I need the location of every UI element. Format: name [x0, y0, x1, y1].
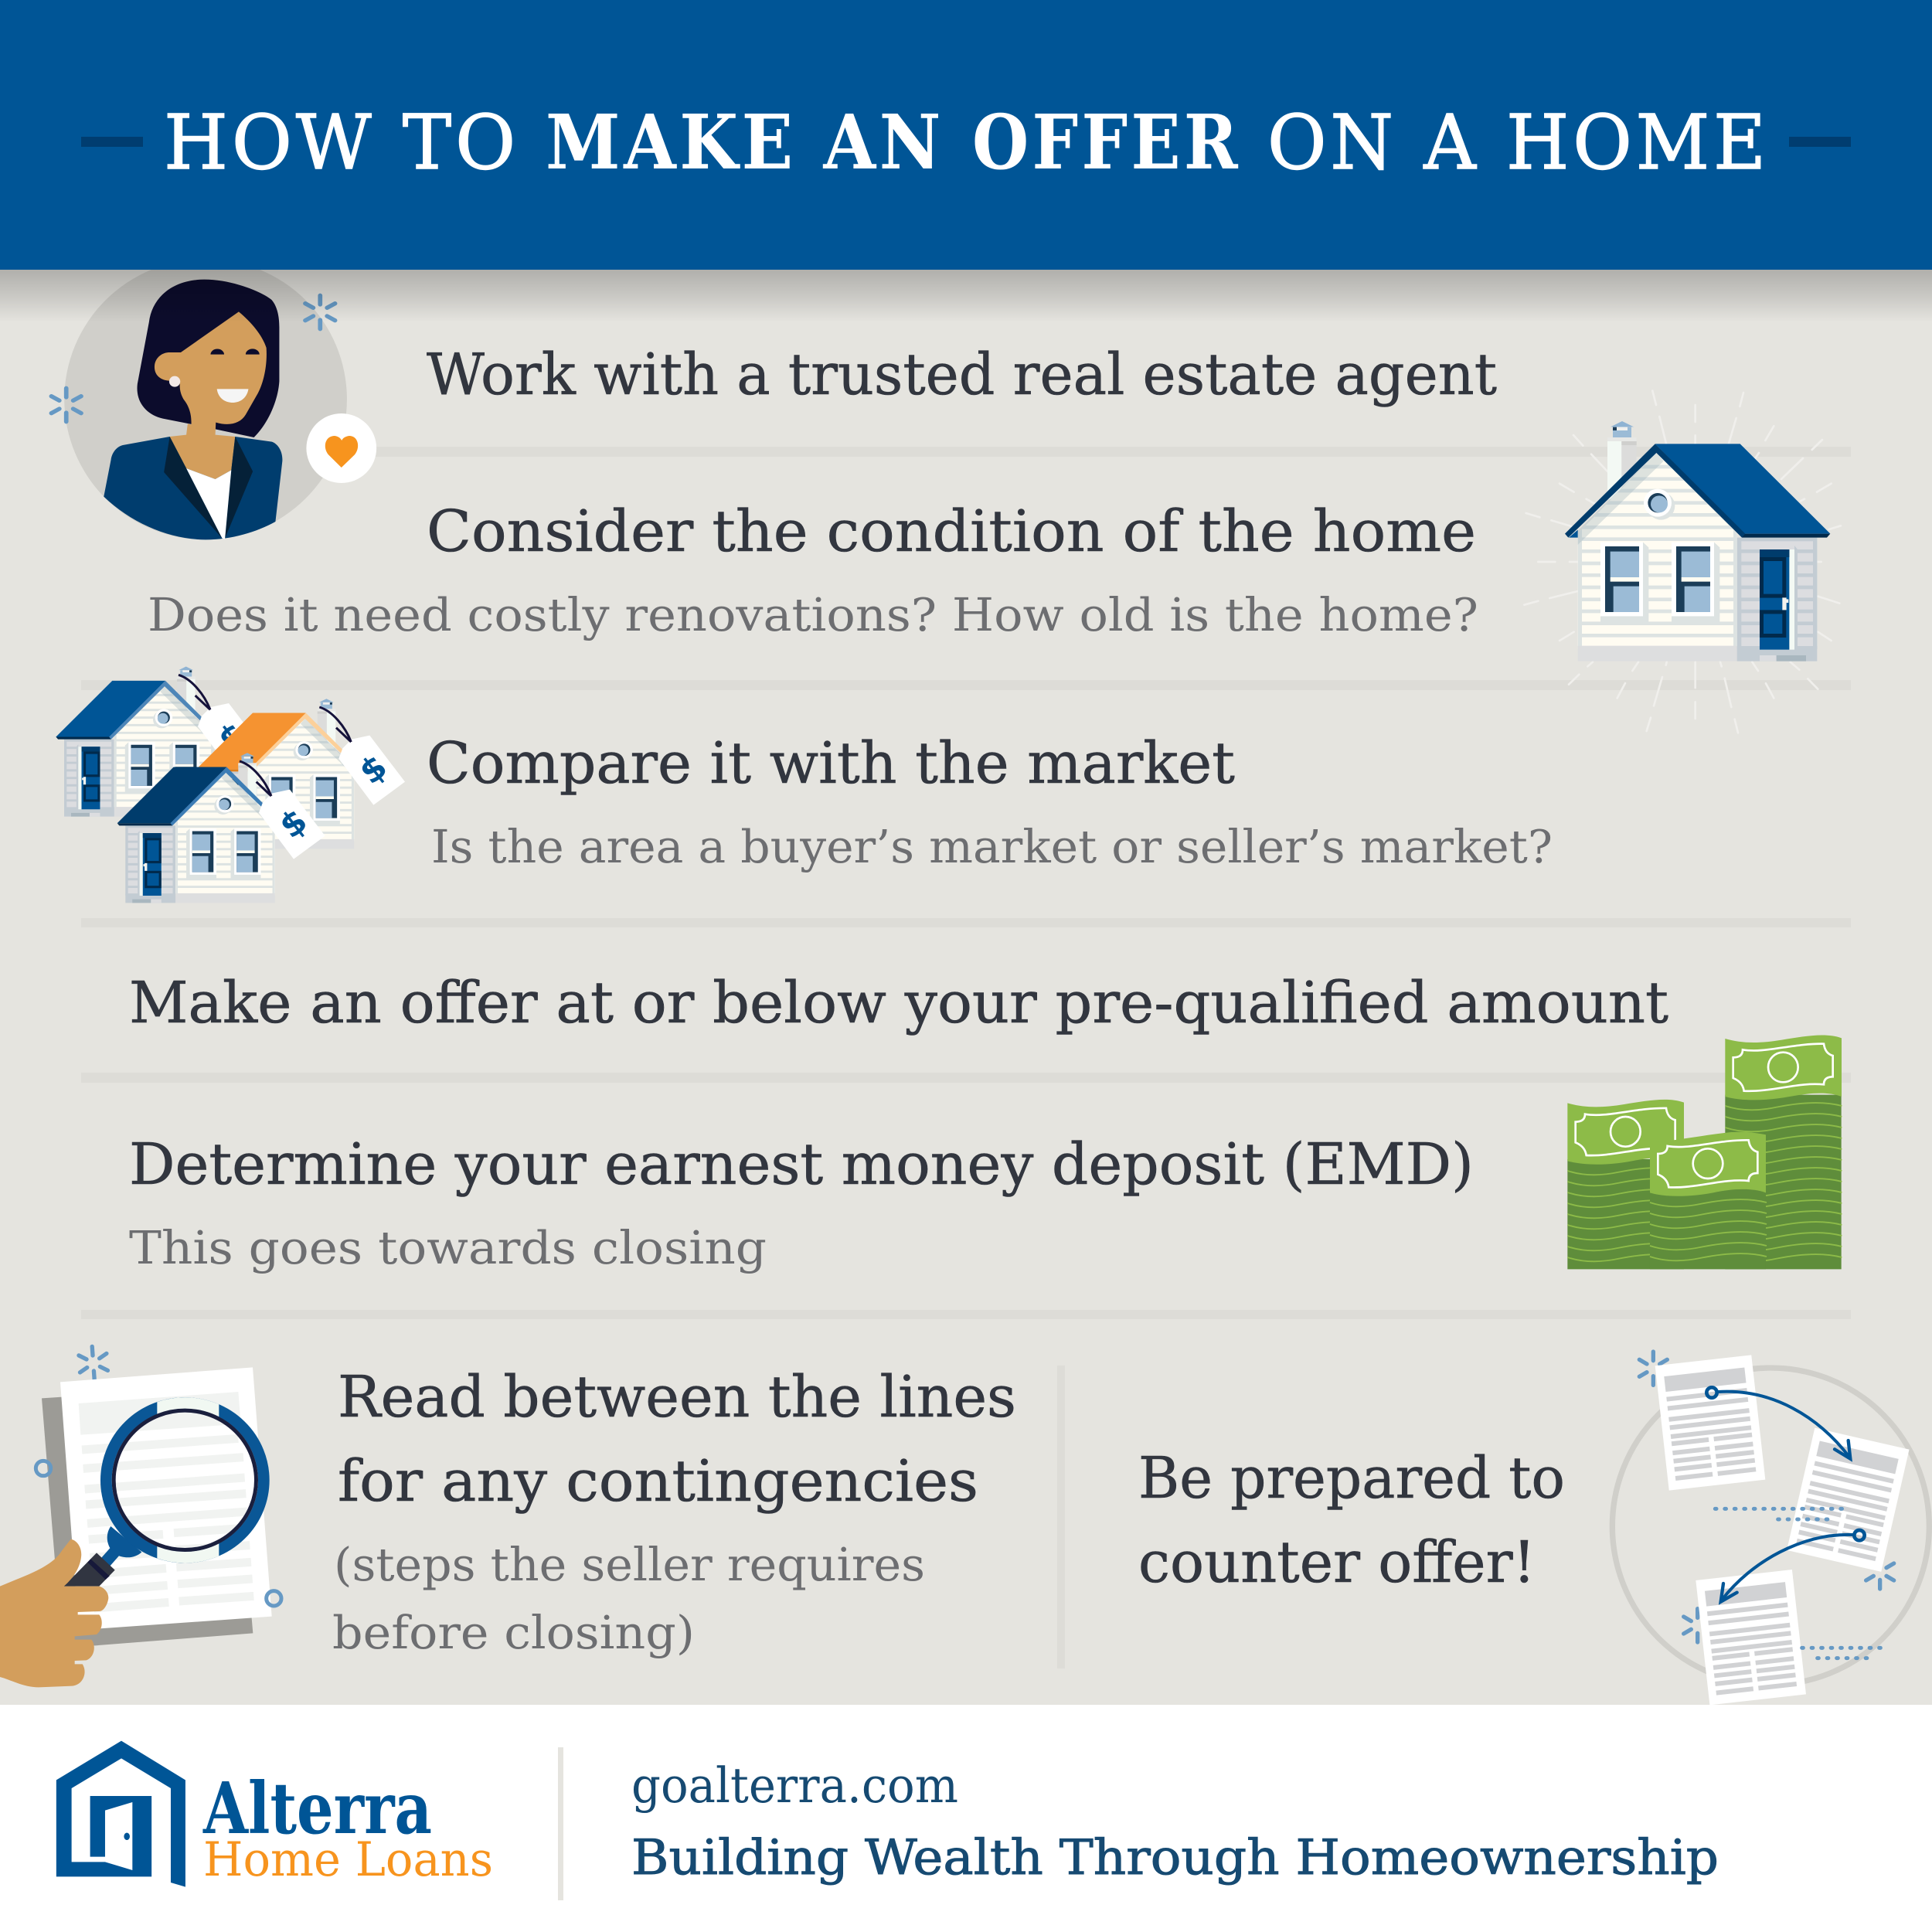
- agent hair: [137, 280, 279, 437]
- title: [81, 98, 1851, 186]
- price tag: $: [352, 747, 395, 792]
- price tag: [319, 707, 405, 805]
- agent lapels: [164, 437, 253, 539]
- header band: [0, 0, 1932, 270]
- logo wordmark: Alterra: [202, 1767, 432, 1850]
- counter offer line 2: counter offer!: [1138, 1529, 1536, 1596]
- heart badge: [306, 413, 376, 483]
- website: goalterra.com: [631, 1757, 958, 1814]
- agent earring: [169, 376, 180, 387]
- price tag: $: [273, 801, 315, 846]
- house: [1565, 421, 1830, 662]
- header shadow: [0, 270, 1932, 322]
- subtext: market: Is the area a buyer’s market or seller’s market?: [431, 820, 1553, 873]
- title: MAKE AN: [546, 98, 944, 186]
- logo: [56, 1741, 493, 1887]
- price tag: $: [212, 716, 253, 760]
- sparkle: [1866, 1556, 1894, 1589]
- agent eyes: [210, 349, 260, 355]
- arrow: second document to third: [1721, 1530, 1865, 1602]
- step: compare with market: [427, 730, 1553, 873]
- agent smile: [217, 389, 248, 403]
- sparkle: [1684, 1609, 1712, 1642]
- document: [1787, 1428, 1909, 1572]
- step: earnest money deposit: [129, 1131, 1474, 1274]
- hand: [0, 1539, 108, 1687]
- subtext line 2: before closing): [332, 1606, 695, 1659]
- document back sheet: [42, 1386, 253, 1646]
- step: read between the lines: Read between the lines: [338, 1364, 1016, 1430]
- logo tagline: Home Loans: [203, 1832, 493, 1887]
- section dividers: [81, 447, 1851, 1668]
- title: ON A HOME: [1267, 99, 1770, 186]
- illustration: magnifier over document: [0, 1345, 281, 1687]
- illustration: documents exchanged in circle: [1612, 1352, 1929, 1705]
- sparkle: [1639, 1352, 1667, 1385]
- step: work with agent: Work with a trusted real estate agent: [427, 342, 1497, 408]
- illustration: three houses with price tags: [56, 667, 405, 903]
- magnifier handle: [64, 1526, 141, 1587]
- title: OFFER: [972, 98, 1241, 186]
- step: consider condition: Consider the condition of the home: [427, 498, 1476, 565]
- step: counter offer: [1138, 1445, 1565, 1596]
- slogan: Building Wealth Through Homeownership: [631, 1829, 1719, 1886]
- step: read between the lines: [332, 1364, 1016, 1659]
- step: consider condition: [148, 498, 1478, 641]
- document: [60, 1367, 272, 1630]
- document: [1655, 1355, 1765, 1491]
- title: HOW TO: [164, 99, 519, 186]
- decorative rings: [36, 1461, 281, 1606]
- heading line 2: for any contingencies: [338, 1448, 978, 1515]
- sparkle: [305, 295, 335, 329]
- step: earnest money deposit: Determine your earnest money deposit (EMD): [129, 1131, 1474, 1198]
- illustration: stacks of money: [1567, 1036, 1842, 1269]
- step: counter offer: Be prepared to: [1138, 1445, 1565, 1512]
- footer divider: [558, 1747, 563, 1900]
- sparkle: [51, 388, 81, 422]
- magnifier lens: [106, 1403, 264, 1557]
- step: make an offer: Make an offer at or below your pre-qualified amount: [129, 970, 1668, 1036]
- subtext: condition: Does it need costly renovations? How old is the home?: [148, 588, 1478, 641]
- subtext line 1: (steps the seller requires: [334, 1538, 925, 1591]
- subtext: closing: This goes towards closing: [129, 1221, 767, 1274]
- arrow: first document to second: [1706, 1387, 1850, 1459]
- price tag: [240, 761, 325, 859]
- agent shirt: [186, 468, 231, 539]
- illustration: highlighted house: [1524, 391, 1841, 733]
- agent jacket: [104, 437, 282, 539]
- price tag: [179, 675, 264, 773]
- dotted lines: [1715, 1509, 1883, 1658]
- illustration: real estate agent: [51, 259, 376, 539]
- footer band: [0, 1705, 1932, 1932]
- step: compare with market: Compare it with the market: [427, 730, 1235, 797]
- document: [1696, 1570, 1806, 1705]
- agent face: [155, 311, 267, 479]
